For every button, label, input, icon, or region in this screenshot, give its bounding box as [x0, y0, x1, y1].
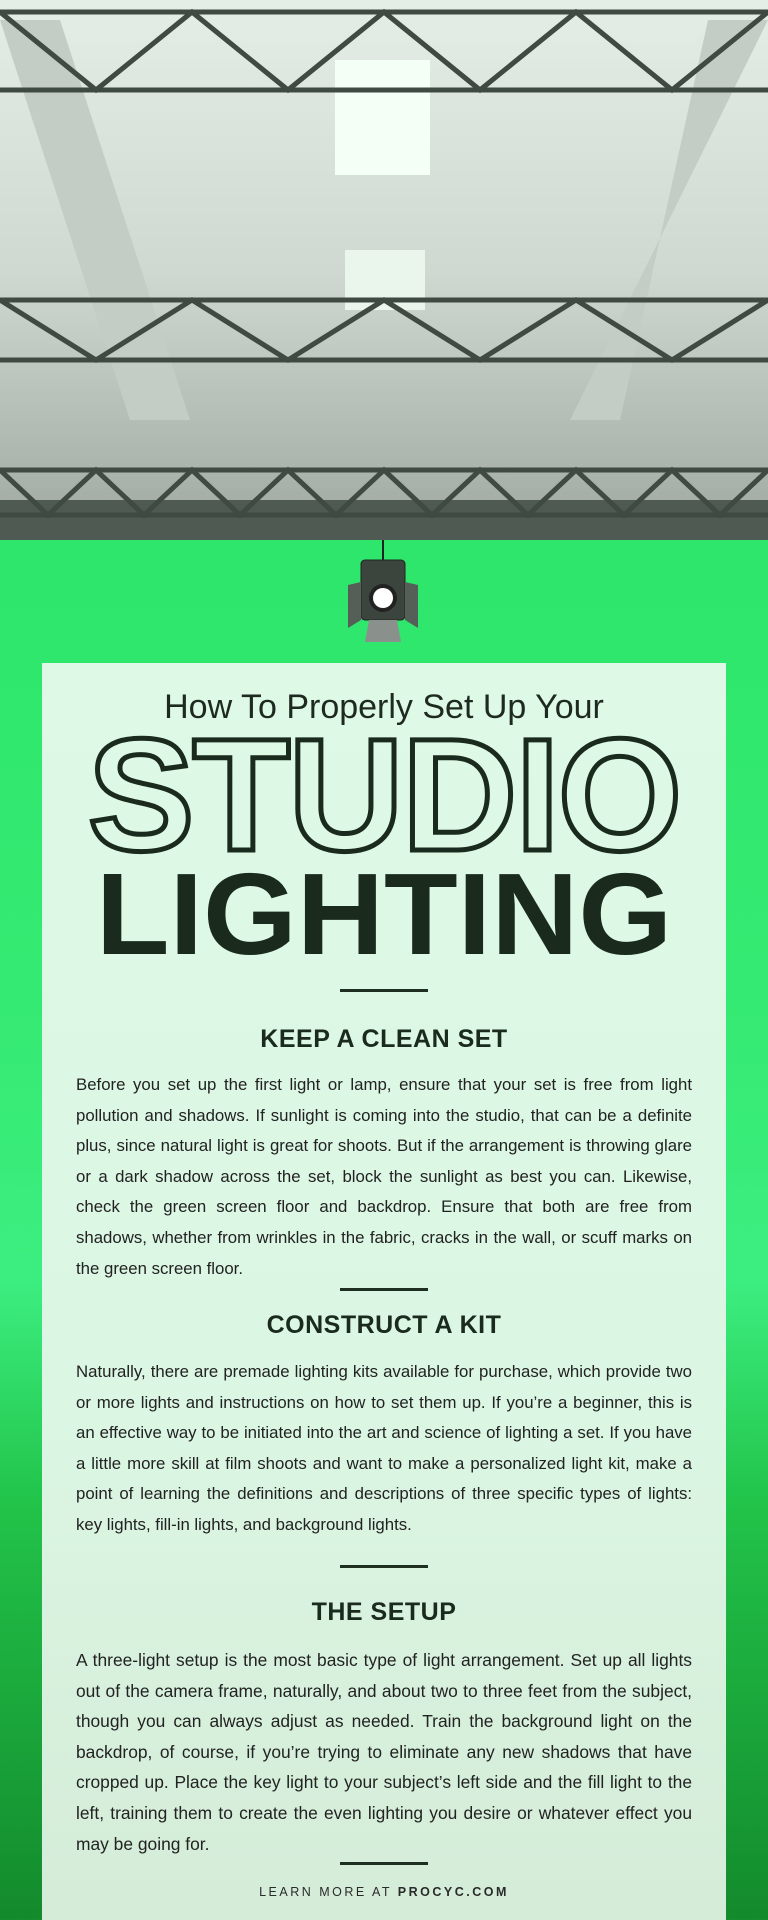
- text: keep a clean set: Before you set up the first light or lamp, ensure that your set is free from light pollution and shadows. If sunlight is coming into the studio, that can be a definite plus, since natural light is great for shoots. But if the arrangement is throwing glare or a dark shadow across the set, block the sunlight as best you can. Likewise, check the green screen floor and backdrop. Ensure that both are free from shadows, whether from wrinkles in the fabric, cracks in the wall, or scuff marks on the green screen floor.: [76, 1075, 692, 1278]
- text: construct a kit: Naturally, there are premade lighting kits available for purchase, which provide two or more lights and instructions on how to set them up. If you’re a beginner, this is an effective way to be initiated into the art and science of lighting a set. If you have a little more skill at film shoots and want to make a personalized light kit, make a point of learning the definitions and descriptions of three specific types of lights: key lights, fill-in lights, and background lights.: [76, 1362, 692, 1534]
- heading: construct a kit: CONSTRUCT A KIT: [267, 1311, 501, 1339]
- text: the setup: A three-light setup is the most basic type of light arrangement. Set up all lights out of the camera frame, naturally, and about two to three feet from the subject, though you can always adjust as needed. Train the background light on the backdrop, of course, if you’re trying to eliminate any new shadows that have cropped up. Place the key light to your subject’s left side and the fill light to the left, training them to create the even lighting you desire or whatever effect you may be going for.: [76, 1650, 692, 1854]
- title: subtitle: How To Properly Set Up Your: [164, 688, 604, 726]
- panel: content: [42, 663, 726, 1920]
- heading: keep a clean set: KEEP A CLEAN SET: [260, 1025, 508, 1053]
- title: LIGHTING: LIGHTING: [96, 849, 672, 979]
- footer: learn more: LEARN MORE AT PROCYC.COM: [259, 1885, 509, 1899]
- ceiling image: [0, 0, 768, 540]
- icon: spotlight: [348, 540, 418, 642]
- heading: the setup: THE SETUP: [312, 1598, 456, 1626]
